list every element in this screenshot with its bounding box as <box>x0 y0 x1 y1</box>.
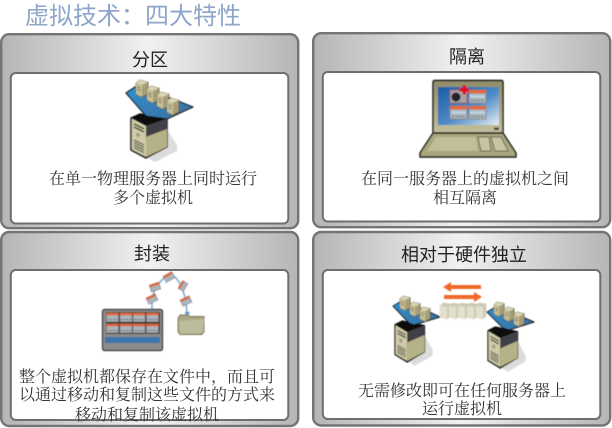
icon: server with virtual machines <box>126 80 193 162</box>
title: 虚拟技术：四大特性 <box>25 3 241 30</box>
icon: migrating VMs between servers <box>393 282 534 372</box>
text: description: 相互隔离 <box>433 189 497 207</box>
heading: 分区: 分区 <box>132 50 168 70</box>
text: description: 整个虚拟机都保存在文件中，而且可 <box>19 367 275 386</box>
icon: laptop with virtual machines <box>420 80 516 157</box>
icon: VM files moving to folder <box>102 271 204 350</box>
text: description: 运行虚拟机 <box>422 400 502 418</box>
text: description: 移动和复制该虚拟机 <box>75 406 219 424</box>
panel: 分区 <box>1 34 298 228</box>
heading: 相对于硬件独立: 相对于硬件独立 <box>401 245 527 265</box>
text: description: 在同一服务器上的虚拟机之间 <box>361 170 569 188</box>
heading: 封装: 封装 <box>134 244 170 264</box>
heading: 隔离: 隔离 <box>449 47 485 67</box>
text: description: 在单一物理服务器上同时运行 <box>49 170 257 188</box>
panel: 封装 <box>1 232 298 426</box>
text: description: 以通过移动和复制这些文件的方式来 <box>19 386 275 404</box>
panel: 相对于硬件独立 <box>313 232 610 426</box>
panel: 隔离 <box>313 33 610 227</box>
text: description: 多个虚拟机 <box>113 189 193 207</box>
arrow: leftward <box>443 282 481 292</box>
text: description: 无需修改即可在任何服务器上 <box>358 382 566 400</box>
arrow: rightward <box>444 292 482 302</box>
